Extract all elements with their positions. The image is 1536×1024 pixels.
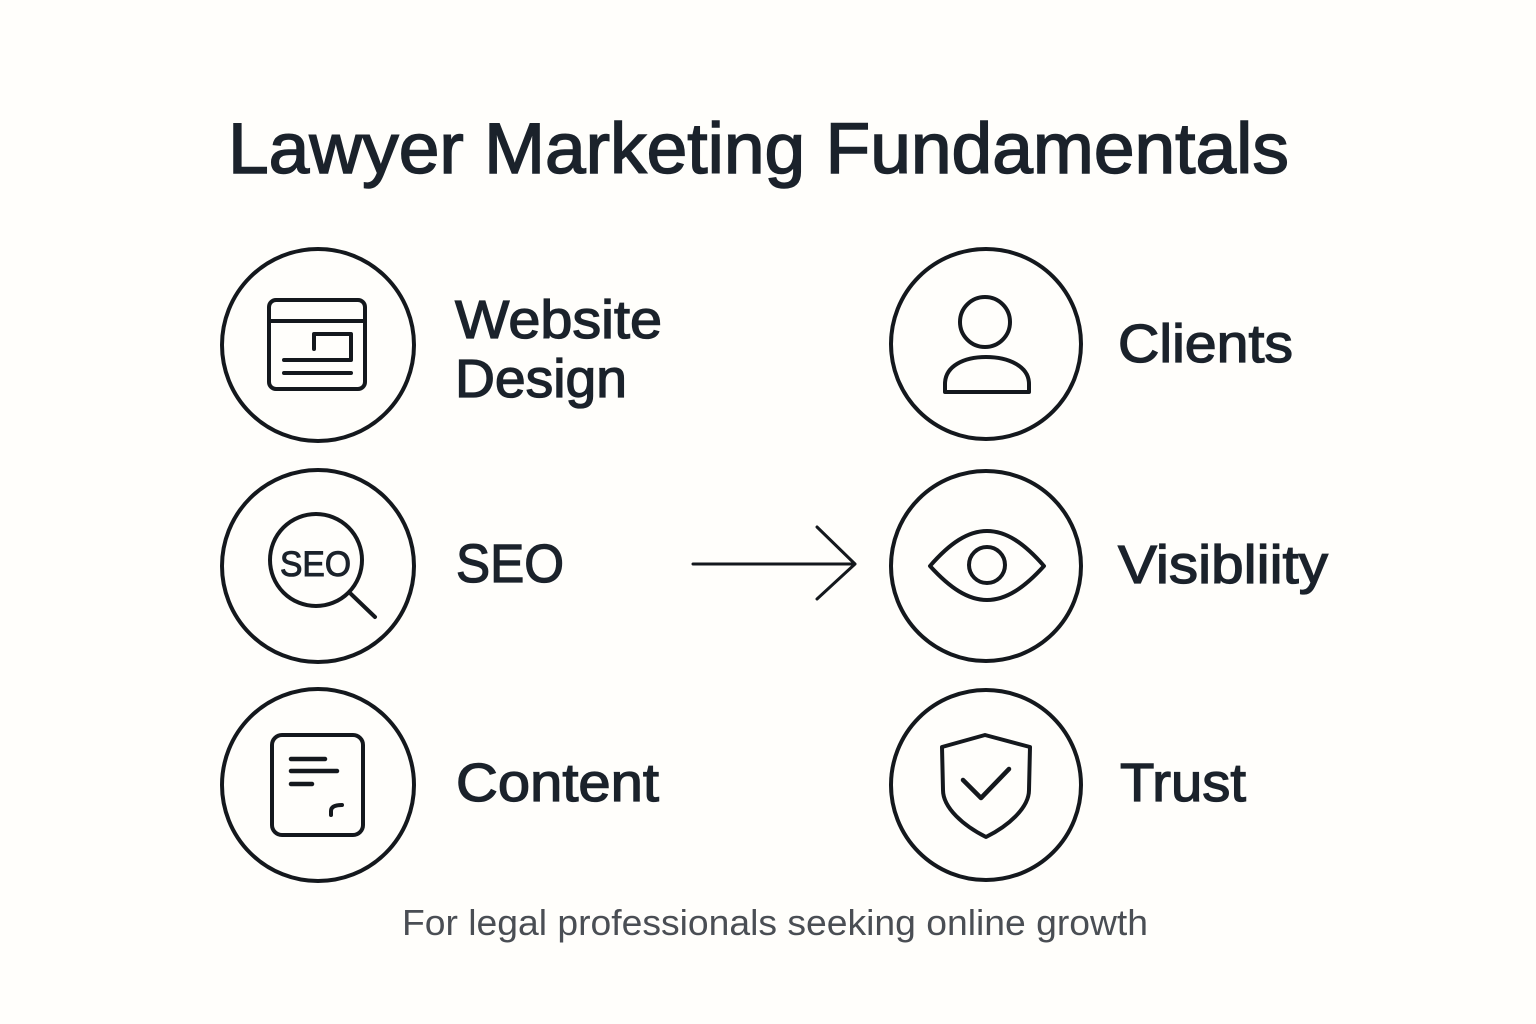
item: Visibility — [891, 471, 1328, 661]
label: Content: Content — [456, 753, 659, 813]
icon: website layout — [222, 249, 414, 441]
item: SEO — [222, 470, 564, 662]
icon: SEO magnifier — [222, 470, 414, 662]
label: Website Design: Website — [455, 290, 662, 350]
arrow — [693, 527, 855, 599]
icon: document — [222, 689, 414, 881]
icon: person — [891, 249, 1081, 439]
label: Clients: Clients — [1118, 314, 1293, 374]
icon text: SEO: SEO — [280, 545, 351, 584]
label: Website Design: Design — [455, 349, 627, 409]
item: Content — [222, 689, 659, 881]
label: Website Design — [455, 290, 662, 409]
label: Trust: Trust — [1120, 753, 1246, 813]
icon: eye — [891, 471, 1081, 661]
item: Website Design — [222, 249, 662, 441]
title: Lawyer Marketing Fundamentals — [228, 110, 1289, 189]
item: Trust — [891, 690, 1246, 880]
icon: shield check — [891, 690, 1081, 880]
label: SEO: SEO — [456, 534, 564, 594]
subtitle: For legal professionals seeking online growth — [402, 902, 1148, 943]
label: Visibliity: Visibliity — [1118, 535, 1328, 595]
item: Clients — [891, 249, 1293, 439]
